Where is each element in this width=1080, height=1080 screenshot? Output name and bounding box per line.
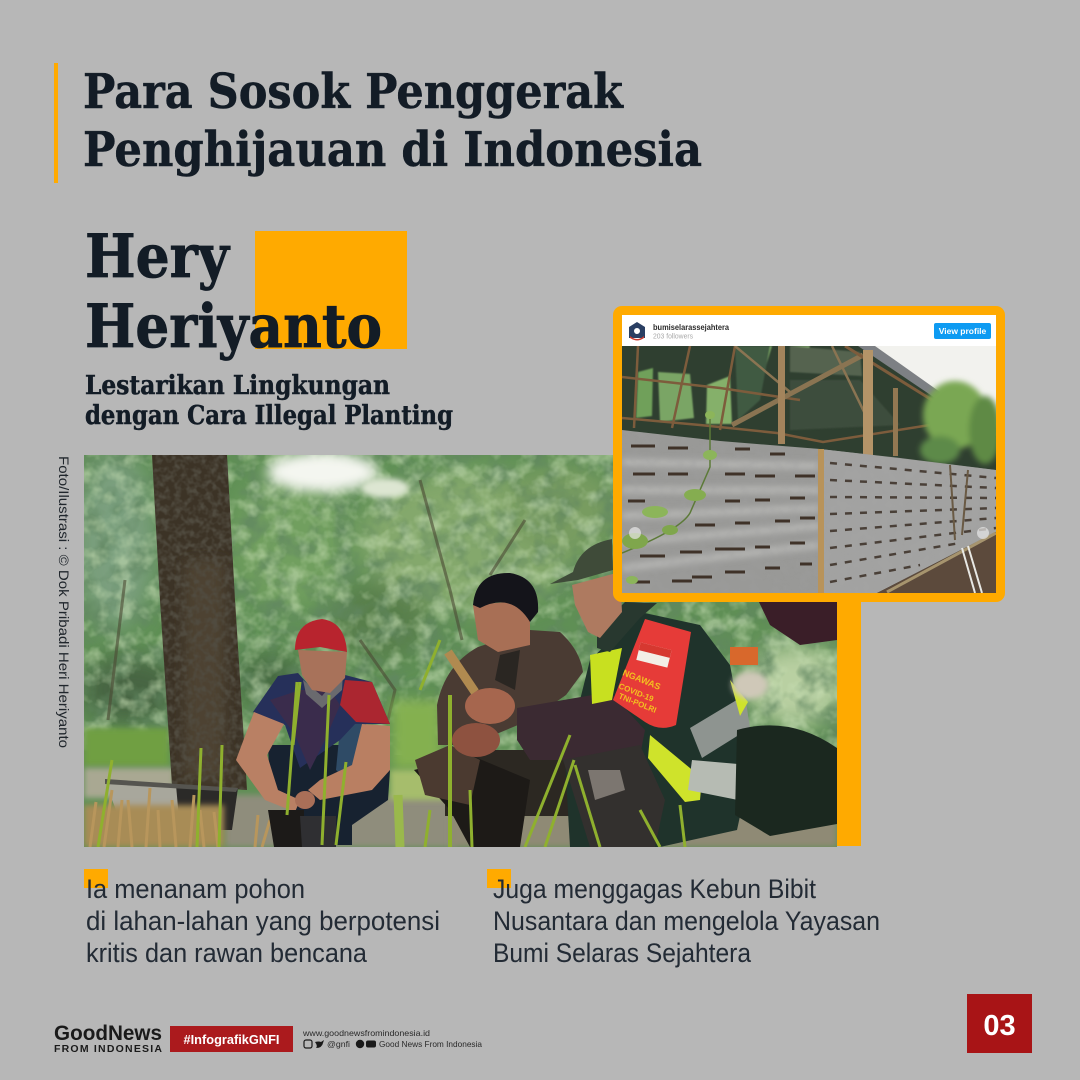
shadow behind men	[445, 750, 575, 816]
planter box	[105, 779, 238, 830]
text column: right	[487, 869, 880, 968]
title accent bar	[54, 63, 58, 183]
icon: instagram	[304, 1040, 312, 1048]
vest	[590, 648, 622, 704]
armband	[613, 619, 691, 728]
man 3: soldier: NGAWAS	[621, 668, 662, 692]
roof	[858, 346, 996, 436]
title block	[54, 63, 702, 183]
hashtag badge	[170, 1026, 293, 1052]
arms	[236, 712, 300, 812]
face	[572, 572, 622, 638]
dry grass	[84, 805, 224, 847]
subtitle: Lestarikan Lingkungan	[85, 371, 390, 401]
inset header	[622, 315, 996, 347]
inset photo: vertical garden wall	[622, 346, 1001, 595]
bamboo frame	[622, 346, 940, 442]
backpack	[735, 725, 837, 836]
branches	[108, 480, 525, 720]
face	[473, 600, 530, 652]
name: Heriyanto	[85, 292, 382, 362]
banana leaves	[636, 346, 900, 430]
legs	[268, 745, 390, 845]
wall pockets right	[830, 463, 996, 582]
text column: right: Bumi Selaras Sejahtera	[493, 938, 752, 968]
view profile button: View profile	[939, 326, 987, 336]
hands	[465, 688, 515, 724]
text column: left: Ia menanam pohon	[86, 874, 305, 904]
wall pockets left	[628, 446, 815, 582]
tree trunks right	[950, 465, 968, 540]
page number	[967, 994, 1032, 1053]
cap	[550, 539, 613, 584]
title: Penghijauan di Indonesia	[83, 122, 702, 178]
icon: twitter	[315, 1040, 324, 1048]
leaf mottling light	[84, 455, 837, 755]
text column: left	[84, 869, 440, 968]
inset orange frame	[613, 306, 1005, 602]
orange bag	[730, 647, 758, 665]
name	[85, 222, 382, 362]
man 3: soldier: COVID-19	[617, 682, 655, 704]
man 1	[236, 619, 390, 847]
tree at right	[920, 381, 1001, 464]
name heading with orange square	[85, 222, 407, 362]
head	[298, 650, 347, 693]
wall ridges	[622, 462, 820, 568]
followers: 203 followers	[653, 334, 693, 340]
soil	[877, 532, 996, 593]
text column: right: Juga menggagas Kebun Bibit	[493, 874, 816, 904]
orange bar behind photo	[830, 590, 861, 846]
photo credit: Foto/Ilustrasi : © Dok Pribadi Heri Heriyanto	[56, 456, 72, 748]
hashtag badge: #InfografikGNFI	[184, 1033, 280, 1047]
leaf mottling dark	[84, 455, 837, 755]
title: Para Sosok Penggerak	[83, 64, 625, 120]
footer logo	[54, 1022, 162, 1055]
icon: facebook	[356, 1040, 364, 1048]
bullet square	[84, 869, 108, 888]
man 2	[414, 573, 583, 847]
vine left	[622, 411, 717, 584]
wood stake	[818, 449, 824, 593]
icon: youtube	[366, 1040, 376, 1048]
footer contacts: @gnfi	[327, 1039, 350, 1049]
man 3: soldier	[517, 539, 750, 847]
page number: 03	[983, 1010, 1016, 1042]
footer logo: GoodNews	[54, 1022, 162, 1045]
top right dark bag	[758, 600, 837, 645]
text column: left: di lahan-lahan yang berpotensi	[86, 906, 440, 936]
sky	[870, 346, 996, 430]
pots	[268, 810, 304, 847]
neck scarf	[303, 680, 342, 708]
lawn	[84, 728, 169, 766]
subtitle: dengan Cara Illegal Planting	[85, 401, 453, 431]
hair	[473, 573, 538, 622]
man 2 legs	[414, 755, 530, 847]
subtitle	[85, 371, 453, 431]
text column: left: kritis dan rawan bencana	[86, 938, 368, 968]
account name: bumiselarassejahtera	[653, 323, 730, 332]
Instagram inset card	[613, 306, 1005, 602]
torso	[565, 612, 750, 847]
footer logo: FROM INDONESIA	[54, 1043, 162, 1055]
foliage background	[75, 450, 845, 725]
sky	[267, 452, 377, 492]
carousel arrows	[629, 527, 641, 539]
icon: account logo	[629, 322, 645, 340]
scarf	[597, 602, 657, 652]
jacket	[437, 630, 583, 745]
footer contacts	[302, 1028, 482, 1049]
text column: right: Nusantara dan mengelola Yayasan	[493, 906, 880, 936]
view profile button	[934, 323, 991, 339]
main photo: three men planting	[75, 450, 845, 847]
shirt	[253, 673, 390, 768]
footer contacts: Good News From Indonesia	[379, 1039, 482, 1049]
man 3: soldier: TNI-POLRI	[617, 692, 658, 715]
grow-bag wall	[622, 425, 996, 595]
leg	[563, 745, 665, 847]
cap	[295, 619, 347, 652]
sleeve	[517, 692, 645, 760]
name: Hery	[85, 222, 231, 292]
seedling bundle	[448, 652, 475, 692]
tree trunk	[152, 455, 247, 790]
bullet square	[487, 869, 511, 888]
ground	[84, 768, 174, 798]
grass blades	[98, 640, 685, 847]
orange square	[255, 231, 407, 349]
title	[83, 64, 702, 178]
footer contacts: www.goodnewsfromindonesia.id	[302, 1028, 430, 1038]
